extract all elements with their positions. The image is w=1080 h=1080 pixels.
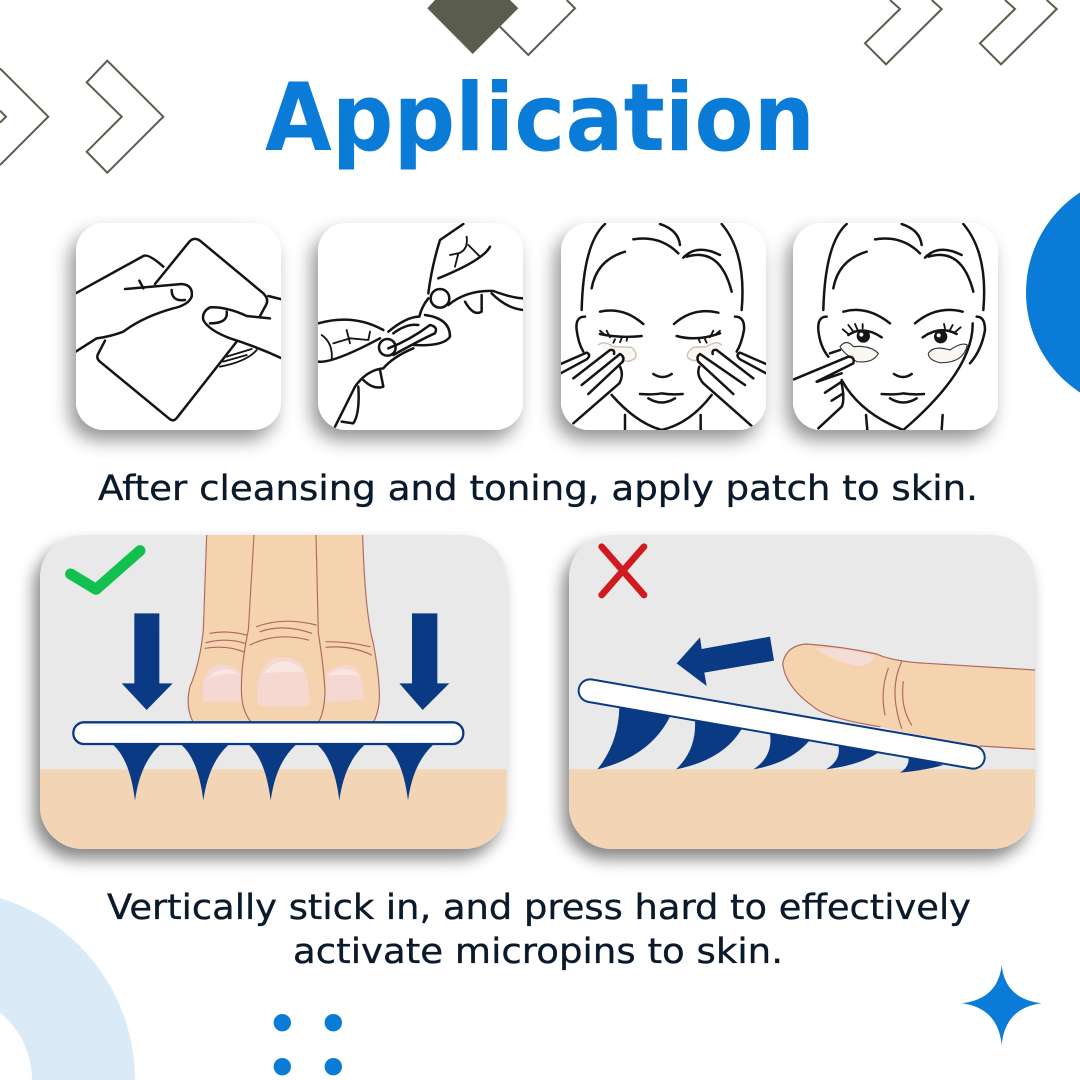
caption: second instruction: activate micropins to skin. [293, 932, 783, 972]
icon: three fingers [188, 530, 379, 723]
decoration: chevrons top left [0, 61, 163, 173]
strip [590, 691, 973, 757]
decoration: four point star [962, 965, 1042, 1045]
icon: finger [783, 644, 1040, 749]
panel: step 1 take patch [76, 223, 282, 430]
icon: green check mark [71, 551, 140, 589]
panel: step 3 apply with both hands [561, 223, 766, 430]
decoration: diamond and chevron top centre [427, 0, 575, 55]
skin layer [569, 769, 1035, 849]
decoration: pale blue arc bottom left [0, 890, 135, 1080]
panel: incorrect sliding press [560, 535, 1060, 856]
title: Application [265, 64, 815, 173]
caption: second instruction [107, 888, 971, 972]
arrow: slide left [677, 637, 774, 686]
panel: step 2 peel patch [318, 223, 523, 430]
skin layer [40, 769, 507, 849]
slanted microneedles [597, 708, 943, 773]
arrow: left down [122, 613, 173, 710]
panel: step 4 press patch [793, 223, 998, 430]
microneedle patch [73, 722, 463, 801]
decoration: dots [274, 1014, 342, 1075]
decoration: chevrons top right [865, 0, 1057, 64]
icon: red cross [602, 547, 644, 595]
caption: first instruction: After cleansing and toning, apply patch to skin. [98, 469, 978, 509]
caption: second instruction: Vertically stick in, and press hard to effectively [107, 888, 971, 928]
arrow: right down [399, 613, 449, 710]
decoration: blue circle right [1026, 173, 1080, 412]
panel: correct vertical press [30, 530, 530, 856]
